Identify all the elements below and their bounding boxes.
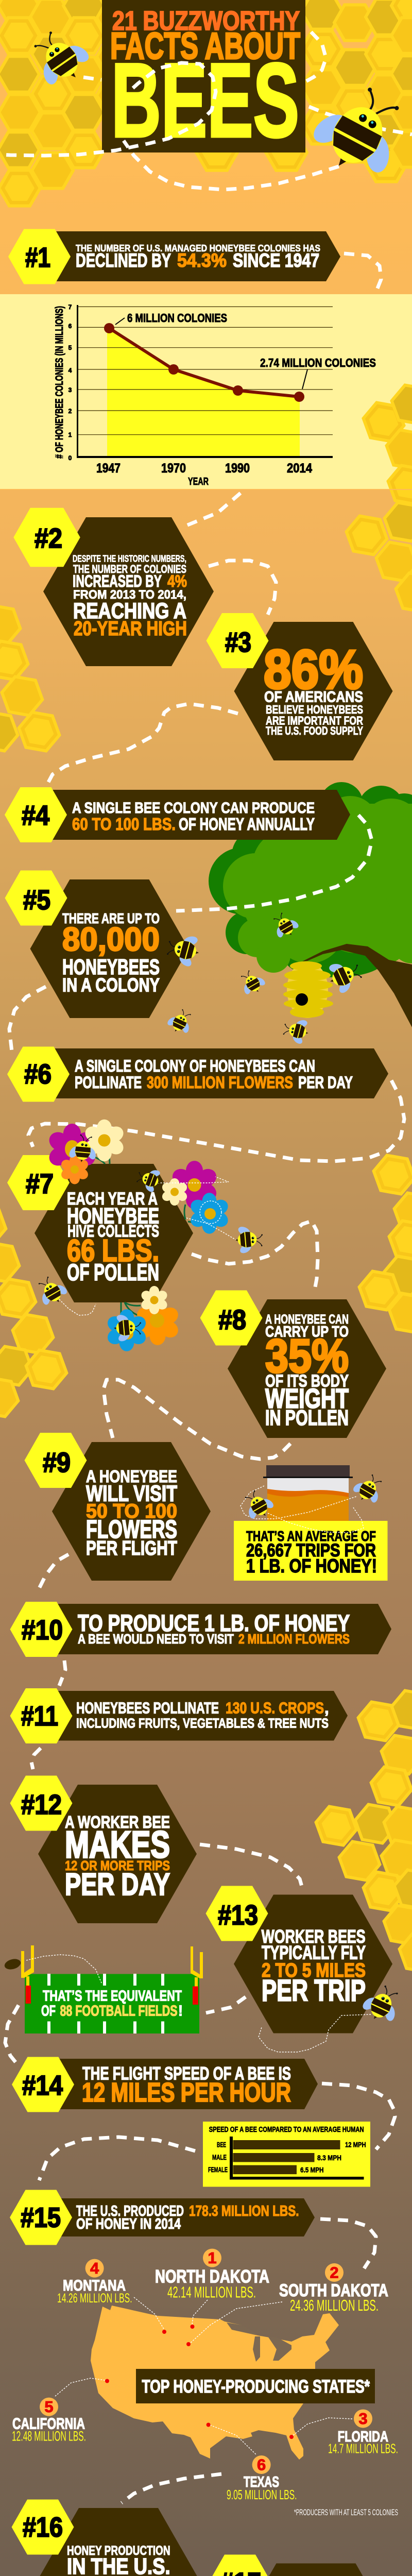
state: Texas: 9.05 MILLION LBS. (227, 2487, 297, 2502)
state: North Dakota: NORTH DAKOTA (155, 2266, 269, 2287)
fact 2: 20-YEAR HIGH (74, 618, 187, 640)
fact 3: OF AMERICANS (264, 688, 363, 706)
fact 12 (10, 1775, 197, 1923)
fact 15: OF HONEY IN 2014 (76, 2216, 181, 2232)
panel: colony decline chart: 6 MILLION COLONIES (127, 311, 227, 325)
state: Montana: 4 (90, 2259, 99, 2277)
fact 8: #8 (218, 1304, 246, 1335)
fact 16 (11, 2500, 198, 2576)
fact 11 (10, 1688, 348, 1743)
panel: colony decline chart: 2.74 MILLION COLONIES (260, 356, 376, 369)
state: Texas (227, 2455, 297, 2502)
fact 9: PER FLIGHT (86, 1537, 177, 1560)
fact 3 (206, 613, 392, 760)
fact 6: 300 MILLION FLOWERS (147, 1073, 293, 1092)
fact 5: THERE ARE UP TO (62, 910, 160, 926)
icon: title bee right (300, 71, 412, 188)
fact 14: #14 (22, 2070, 63, 2101)
title box: FACTS ABOUT (110, 26, 300, 67)
map title box (136, 2369, 375, 2403)
state: Montana (57, 2259, 132, 2306)
panel: football field: 88 FOOTBALL FIELDS (60, 2003, 177, 2020)
panel: colony decline chart: 1970 (161, 461, 186, 476)
fact 6: #6 (24, 1059, 52, 1090)
fact 2: #2 (35, 523, 62, 554)
fact 5: #5 (23, 885, 50, 916)
panel: colony decline chart: 1947 (96, 461, 121, 476)
panel: bee speed bar chart: SPEED OF A BEE COMPARED TO AN AVERAGE HUMAN (209, 2125, 364, 2134)
fact 3: THE U.S. FOOD SUPPLY (266, 724, 363, 737)
panel: colony decline chart: 7 (68, 303, 72, 311)
fact 17 (209, 2554, 396, 2576)
fact 11: , (324, 1699, 329, 1717)
fact 7: #7 (26, 1168, 54, 1199)
fact 1: DECLINED BY (76, 250, 171, 271)
fact 3: #3 (225, 627, 251, 658)
panel: bee speed bar chart: 8.3 MPH (317, 2154, 341, 2162)
fact 3: 86% (264, 638, 363, 700)
fact 6: PER DAY (298, 1073, 353, 1092)
icon: beehive (283, 961, 333, 1018)
state: California: 12.48 MILLION LBS. (12, 2428, 86, 2444)
fact 14 (12, 2057, 318, 2112)
fact 8: A HONEYBEE CAN (265, 1312, 349, 1327)
fact 2: INCREASED BY (73, 572, 162, 590)
panel: bee speed bar chart: 12 MPH (345, 2140, 366, 2148)
state: Florida: FLORIDA (338, 2429, 388, 2445)
fact 12: A WORKER BEE (65, 1812, 170, 1832)
fact 5: HONEYBEES (62, 955, 160, 979)
fact 9: #9 (43, 1447, 71, 1478)
panel: colony decline chart: 0 (68, 454, 72, 462)
fact 12: #12 (21, 1789, 62, 1820)
fact 12: MAKES (65, 1824, 170, 1866)
fact 2: 4% (167, 572, 187, 590)
fact 2: REACHING A (73, 599, 186, 623)
state: California (12, 2398, 86, 2444)
panel: colony decline chart (0, 294, 412, 506)
fact 5: 80,000 (62, 921, 160, 958)
fact 8 (200, 1290, 386, 1438)
fact 11: INCLUDING FRUITS, VEGETABLES & TREE NUTS (76, 1716, 329, 1731)
fact 4: #4 (22, 800, 49, 831)
fact 11: HONEYBEES POLLINATE (76, 1699, 219, 1717)
map leader lines and dots (55, 2297, 352, 2454)
panel: bee speed bar chart: BEE (217, 2140, 226, 2148)
fact 1: THE NUMBER OF U.S. MANAGED HONEYBEE COLONIES HAS (76, 243, 320, 253)
fact 3: BELIEVE HONEYBEES (266, 703, 363, 716)
fact 9: WILL VISIT (86, 1481, 177, 1506)
panel: bee speed bar chart: MALE (212, 2153, 227, 2161)
fact 6 (7, 1047, 388, 1101)
fact 16: HONEY PRODUCTION (67, 2544, 170, 2558)
state: California: CALIFORNIA (12, 2415, 85, 2433)
fact 13: TYPICALLY FLY (262, 1942, 366, 1963)
fact 2: DESPITE THE HISTORIC NUMBERS, (73, 553, 186, 564)
panel: bee speed bar chart: 6.5 MPH (300, 2166, 323, 2174)
state: Texas: TEXAS (244, 2474, 279, 2490)
fact 10 (10, 1602, 391, 1657)
tree with foliage and trunk (209, 782, 412, 1027)
icon: honey jar with callout: THAT’S AN AVERAGE OF (246, 1528, 376, 1544)
icon: honey jar with callout (234, 1465, 389, 1581)
fact 4: A SINGLE BEE COLONY CAN PRODUCE (72, 800, 315, 817)
fact 9: 50 TO 100 (86, 1500, 177, 1522)
fact 12: 12 OR MORE TRIPS (65, 1858, 170, 1873)
fact 10: A BEE WOULD NEED TO VISIT (78, 1631, 234, 1647)
fact 2: THE NUMBER OF COLONIES (73, 563, 186, 575)
fact 8: CARRY UP TO (265, 1323, 349, 1340)
trail: title bee path under box (83, 32, 412, 134)
icon: flower bees (31, 1133, 264, 1344)
fact 15: THE U.S. PRODUCED (76, 2203, 184, 2219)
state: South Dakota (279, 2263, 388, 2314)
fact 7: HONEYBEE (67, 1204, 159, 1228)
panel: colony decline chart: 2014 (287, 461, 312, 476)
panel: colony decline chart: 2 (68, 408, 72, 415)
fact 5: IN A COLONY (62, 975, 160, 995)
fact 1: SINCE 1947 (233, 250, 319, 271)
fact 4 (5, 787, 350, 842)
fact 13: PER TRIP (262, 1974, 366, 2007)
fact 7: EACH YEAR A (67, 1189, 158, 1209)
title box: BEES (111, 42, 299, 159)
panel: colony decline chart: 4 (68, 367, 72, 374)
icon: honey jar with callout: 26,667 TRIPS FOR (246, 1540, 376, 1561)
fact 13 (206, 1886, 407, 2052)
fact 12: PER DAY (65, 1867, 170, 1902)
state: North Dakota: 1 (208, 2249, 217, 2267)
map: top honey producing states (12, 2249, 398, 2517)
panel: colony decline chart: 3 (68, 386, 72, 394)
state: Texas: 6 (257, 2455, 266, 2474)
panel: bee speed bar chart: FEMALE (208, 2165, 228, 2174)
fact 2: FROM 2013 TO 2014, (73, 588, 186, 602)
fact 8: IN POLLEN (265, 1405, 349, 1430)
panel: bee speed bar chart (203, 2122, 370, 2187)
fact 16: #16 (23, 2512, 63, 2543)
fact 13: #13 (218, 1900, 258, 1931)
panel: colony decline chart: 1990 (225, 461, 250, 476)
fact 13: WORKER BEES (262, 1926, 366, 1947)
panel: colony decline chart: YEAR (188, 476, 209, 487)
state: North Dakota (155, 2249, 269, 2301)
fact 7: HIVE COLLECTS (67, 1222, 159, 1241)
fact 14: THE FLIGHT SPEED OF A BEE IS (82, 2064, 291, 2083)
fact 8: WEIGHT (265, 1384, 349, 1414)
fact 7: 66 LBS. (67, 1233, 159, 1268)
fact 7: OF POLLEN (67, 1259, 159, 1285)
state: South Dakota: 2 (330, 2264, 339, 2281)
state: Florida: 3 (358, 2410, 368, 2428)
state: Montana: 14.26 MILLION LBS. (57, 2291, 132, 2306)
fact 11: 130 U.S. CROPS (226, 1699, 324, 1717)
fact 15: 178.3 MILLION LBS. (189, 2203, 299, 2219)
state: North Dakota: 42.14 MILLION LBS. (167, 2283, 256, 2301)
fact 9 (25, 1433, 211, 1581)
panel: colony decline chart: 5 (68, 344, 72, 351)
icon: title bee left (22, 19, 98, 94)
fact 15 (10, 2190, 315, 2245)
icon: honey jar with callout: 1 LB. OF HONEY! (246, 1555, 377, 1577)
fact 8: 35% (265, 1330, 349, 1383)
panel: colony decline chart: # OF HONEYBEE COLONIES (IN MILLIONS) (54, 306, 65, 459)
fact 4: 60 TO 100 LBS. (72, 815, 176, 834)
fact 8: OF ITS BODY (265, 1371, 349, 1390)
fact 10: #10 (22, 1615, 63, 1646)
icon: bees around the hive (163, 908, 367, 1047)
state: California: 5 (44, 2398, 54, 2416)
flower cluster upper (46, 1120, 236, 1240)
fact 7 (7, 1155, 193, 1302)
fact 14: 12 MILES PER HOUR (82, 2078, 291, 2108)
honeycomb: top right (196, 0, 412, 182)
fact 4: OF HONEY ANNUALLY (179, 815, 315, 834)
fact 9: A HONEYBEE (86, 1467, 177, 1486)
fact 1: #1 (25, 242, 50, 273)
panel: football field (4, 1945, 203, 2033)
flower cluster lower (59, 1286, 181, 1351)
fact 15: #15 (21, 2202, 61, 2233)
panel: colony decline chart: 6 (68, 323, 72, 330)
fact 13: 2 TO 5 MILES (262, 1960, 366, 1981)
fact 1 (8, 229, 340, 284)
fact 3: ARE IMPORTANT FOR (266, 714, 363, 727)
title box (102, 0, 305, 159)
panel: colony decline chart: 1 (68, 431, 72, 438)
panel: football field: ! (178, 2003, 183, 2020)
title box: 21 BUZZWORTHY (112, 6, 300, 36)
state: Montana: MONTANA (63, 2277, 126, 2294)
honeycomb: top left (0, 0, 138, 206)
fact 9: FLOWERS (86, 1516, 177, 1544)
fact 6: POLLINATE (75, 1073, 142, 1092)
fact 1: 54.3% (177, 250, 227, 271)
panel: football field: OF (41, 2003, 56, 2020)
panel: football field: THAT’S THE EQUIVALENT (43, 1988, 182, 2004)
fact 6: A SINGLE COLONY OF HONEYBEES CAN (75, 1057, 315, 1075)
fact 11: #11 (21, 1701, 58, 1732)
state: Florida (328, 2409, 398, 2456)
fact 2 (13, 508, 214, 666)
fact 10: 2 MILLION FLOWERS (238, 1631, 350, 1647)
fact 5 (5, 871, 188, 1018)
